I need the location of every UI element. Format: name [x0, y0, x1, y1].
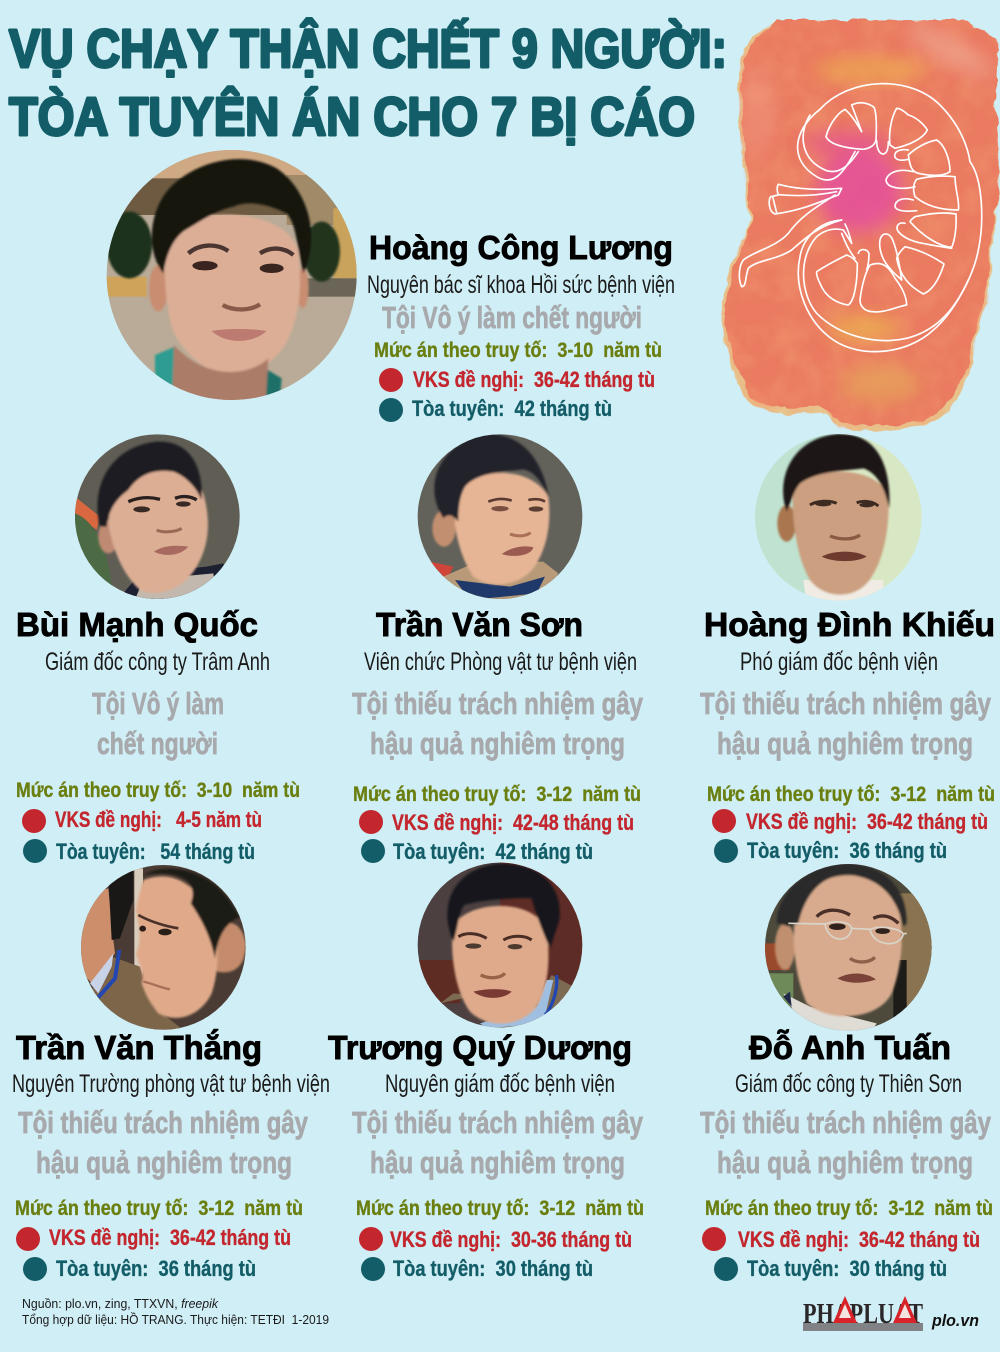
- name: Trương Quý Dương: [328, 1029, 632, 1066]
- name: Trần Văn Sơn: [376, 606, 583, 643]
- role: Nguyên giám đốc bệnh viện: [385, 1070, 615, 1098]
- court verdict: Tòa tuyên: 36 tháng tù: [56, 1256, 256, 1281]
- charge: [18, 1105, 309, 1180]
- court verdict: Tòa tuyên: 36 tháng tù: [747, 838, 947, 863]
- charge: hậu quả nghiêm trọng: [370, 1145, 625, 1180]
- charge: chết người: [97, 726, 218, 761]
- person: Trần Văn Sơn: [352, 430, 644, 864]
- person: Hoàng Công Lương: [100, 145, 675, 422]
- name: Đỗ Anh Tuấn: [749, 1029, 951, 1066]
- title: [9, 18, 727, 147]
- prosecutor proposal: VKS đề nghị: 30-36 tháng tù: [390, 1227, 632, 1252]
- charge: [352, 1105, 644, 1180]
- court verdict: Tòa tuyên: 30 tháng tù: [393, 1256, 593, 1281]
- court verdict: Tòa tuyên: 42 tháng tù: [393, 839, 593, 864]
- sentence range: Mức án theo truy tố: 3-12 năm tù: [15, 1197, 303, 1220]
- charge: Tội thiếu trách nhiệm gây: [18, 1105, 309, 1140]
- title: VỤ CHẠY THẬN CHẾT 9 NGƯỜI:: [9, 18, 727, 79]
- name: Bùi Mạnh Quốc: [16, 606, 258, 643]
- watercolor blob: [722, 20, 999, 430]
- charge: hậu quả nghiêm trọng: [36, 1145, 292, 1180]
- name: Hoàng Công Lương: [369, 229, 673, 266]
- source credits: Tổng hợp dữ liệu: HỒ TRANG. Thực hiện: TETĐI 1-2019: [22, 1312, 329, 1327]
- source credits: [22, 1296, 329, 1327]
- role: Viên chức Phòng vật tư bệnh viện: [364, 648, 637, 676]
- sentence range: Mức án theo truy tố: 3-12 năm tù: [356, 1197, 644, 1220]
- prosecutor proposal: VKS đề nghị: 42-48 tháng tù: [392, 810, 634, 835]
- charge: [352, 686, 644, 761]
- charge: Tội thiếu trách nhiệm gây: [352, 686, 644, 721]
- prosecutor proposal: VKS đề nghị: 4-5 năm tù: [55, 807, 262, 832]
- name: Trần Văn Thắng: [16, 1029, 262, 1066]
- charge: Tội thiếu trách nhiệm gây: [352, 1105, 644, 1140]
- charge: hậu quả nghiêm trọng: [370, 726, 625, 761]
- person: Đỗ Anh Tuấn: [700, 860, 993, 1281]
- sentence range: Mức án theo truy tố: 3-12 năm tù: [353, 783, 641, 806]
- prosecutor proposal: VKS đề nghị: 36-42 tháng tù: [49, 1225, 291, 1250]
- portrait: Trương Quý Dương: [417, 860, 583, 1033]
- prosecutor proposal: [22, 807, 262, 833]
- logo: Pháp Luật: PHAPLUAT: [803, 1299, 923, 1330]
- illustration: kidney on watercolor blob: [720, 13, 1000, 433]
- court verdict: Tòa tuyên: 30 tháng tù: [747, 1256, 947, 1281]
- person: Bùi Mạnh Quốc: [16, 430, 300, 864]
- role: Nguyên bác sĩ khoa Hồi sức bệnh viện: [367, 271, 675, 299]
- person: Trần Văn Thắng: [12, 860, 330, 1281]
- court verdict: Tòa tuyên: 54 tháng tù: [56, 839, 255, 864]
- site name: plo.vn: [931, 1311, 979, 1330]
- sentence range: Mức án theo truy tố: 3-10 năm tù: [374, 339, 662, 362]
- portrait: Hoàng Công Lương: [106, 150, 357, 400]
- portrait: Đỗ Anh Tuấn: [763, 860, 933, 1033]
- charge: [700, 1105, 992, 1180]
- portrait: Hoàng Đình Khiếu: [753, 430, 927, 603]
- role: Giám đốc công ty Trâm Anh: [45, 648, 270, 676]
- charge: Tội Vô ý làm chết người: [382, 300, 642, 335]
- portrait: Trần Văn Thắng: [80, 860, 250, 1033]
- charge: Tội Vô ý làm: [92, 686, 224, 721]
- source credits: Nguồn: plo.vn, zing, TTXVN, freepik: [22, 1296, 219, 1311]
- sentence range: Mức án theo truy tố: 3-10 năm tù: [16, 779, 300, 802]
- kidney outline: [739, 84, 982, 352]
- title: TÒA TUYÊN ÁN CHO 7 BỊ CÁO: [9, 86, 695, 147]
- role: Nguyên Trường phòng vật tư bệnh viện: [12, 1070, 330, 1098]
- charge: [700, 686, 992, 761]
- person: Hoàng Đình Khiếu: [700, 430, 995, 863]
- portrait: Trần Văn Sơn: [417, 430, 587, 603]
- person: Trương Quý Dương: [328, 860, 644, 1281]
- prosecutor proposal: VKS đề nghị: 36-42 tháng tù: [413, 367, 655, 392]
- court verdict: Tòa tuyên: 42 tháng tù: [412, 396, 612, 421]
- portrait: Bùi Mạnh Quốc: [73, 430, 243, 603]
- charge: [92, 686, 224, 761]
- name: Hoàng Đình Khiếu: [704, 606, 995, 643]
